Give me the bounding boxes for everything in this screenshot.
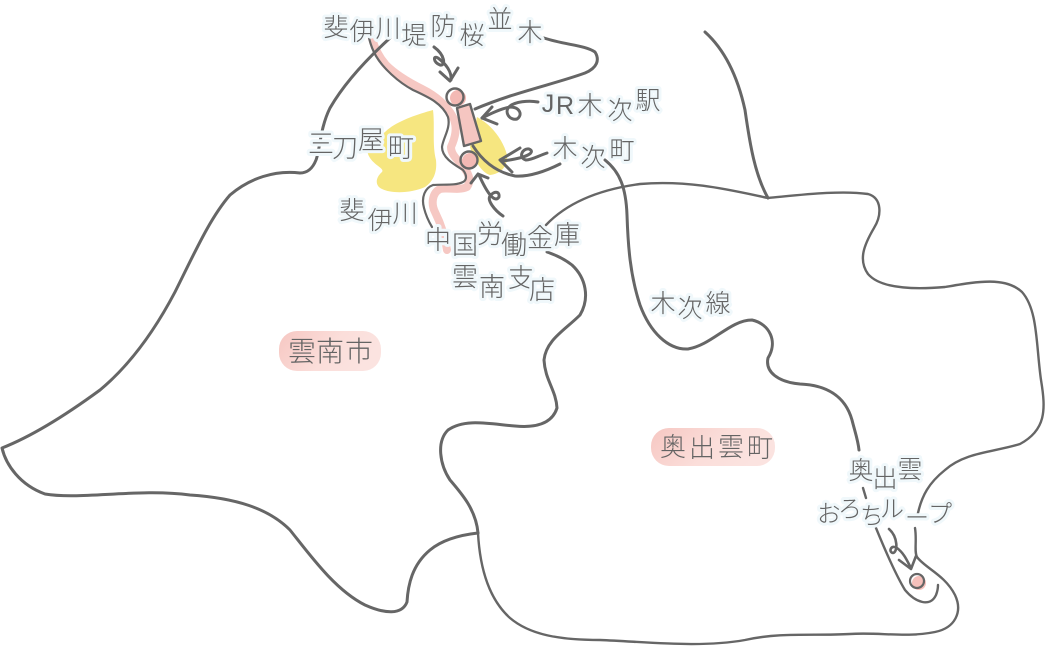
label: Hii River: 斐伊川 [339,197,418,235]
station: JR Kisuki Station [457,104,481,146]
area: Mitoya-cho yellow [368,110,436,192]
label: Kisuki Line: 木次線 [650,290,731,323]
label: Kisuki-cho: 木次町 [552,135,635,172]
arrow: to cherry trees [434,47,458,81]
label: Chugoku Rokin Bank Unnan Branch: 中国労働金庫雲南支店 [425,219,580,305]
rail: Kisuki line [605,160,859,450]
boundary: northeast line [705,32,768,198]
label: Orochi Loop: おろちループ [817,496,952,532]
label: JR Kisuki Station: JR木次駅 [542,87,661,125]
area: Kisuki-cho yellow [470,117,507,175]
rail: Kisuki line upper [473,146,560,176]
marker: Chugoku Rokin Bank [460,152,478,169]
label: Okuizumo: 奥出雲 [848,456,923,493]
badge: Unnan City: 雲南市 [288,336,373,367]
boundary: Okuizumo north and east [546,183,1044,518]
boundary: Okuizumo south [478,528,958,644]
arrow: to Orochi Loop [889,529,916,569]
boundary: Unnan city west [2,38,478,612]
badge: Unnan City [279,331,381,371]
boundary: Okuizumo town [441,252,586,533]
arrow: to bank [471,174,503,216]
marker: Okuizumo Orochi Loop [910,574,926,590]
label: Hii River bank cherry trees: 斐伊川堤防桜並木 [323,6,543,50]
arrow: to JR Kisuki Station [482,101,538,124]
badge: Okuizumo Town: 奥出雲町 [660,432,773,463]
label: Mitoya-cho: 三刀屋町 [308,125,414,163]
rail: Kisuki line to Orochi Loop [863,488,938,602]
marker: Hii River cherry trees [446,88,466,106]
rail: Namiki line to station [475,38,597,109]
river: Hii River [369,38,469,250]
arrow: to Kisuki-cho [500,148,547,172]
